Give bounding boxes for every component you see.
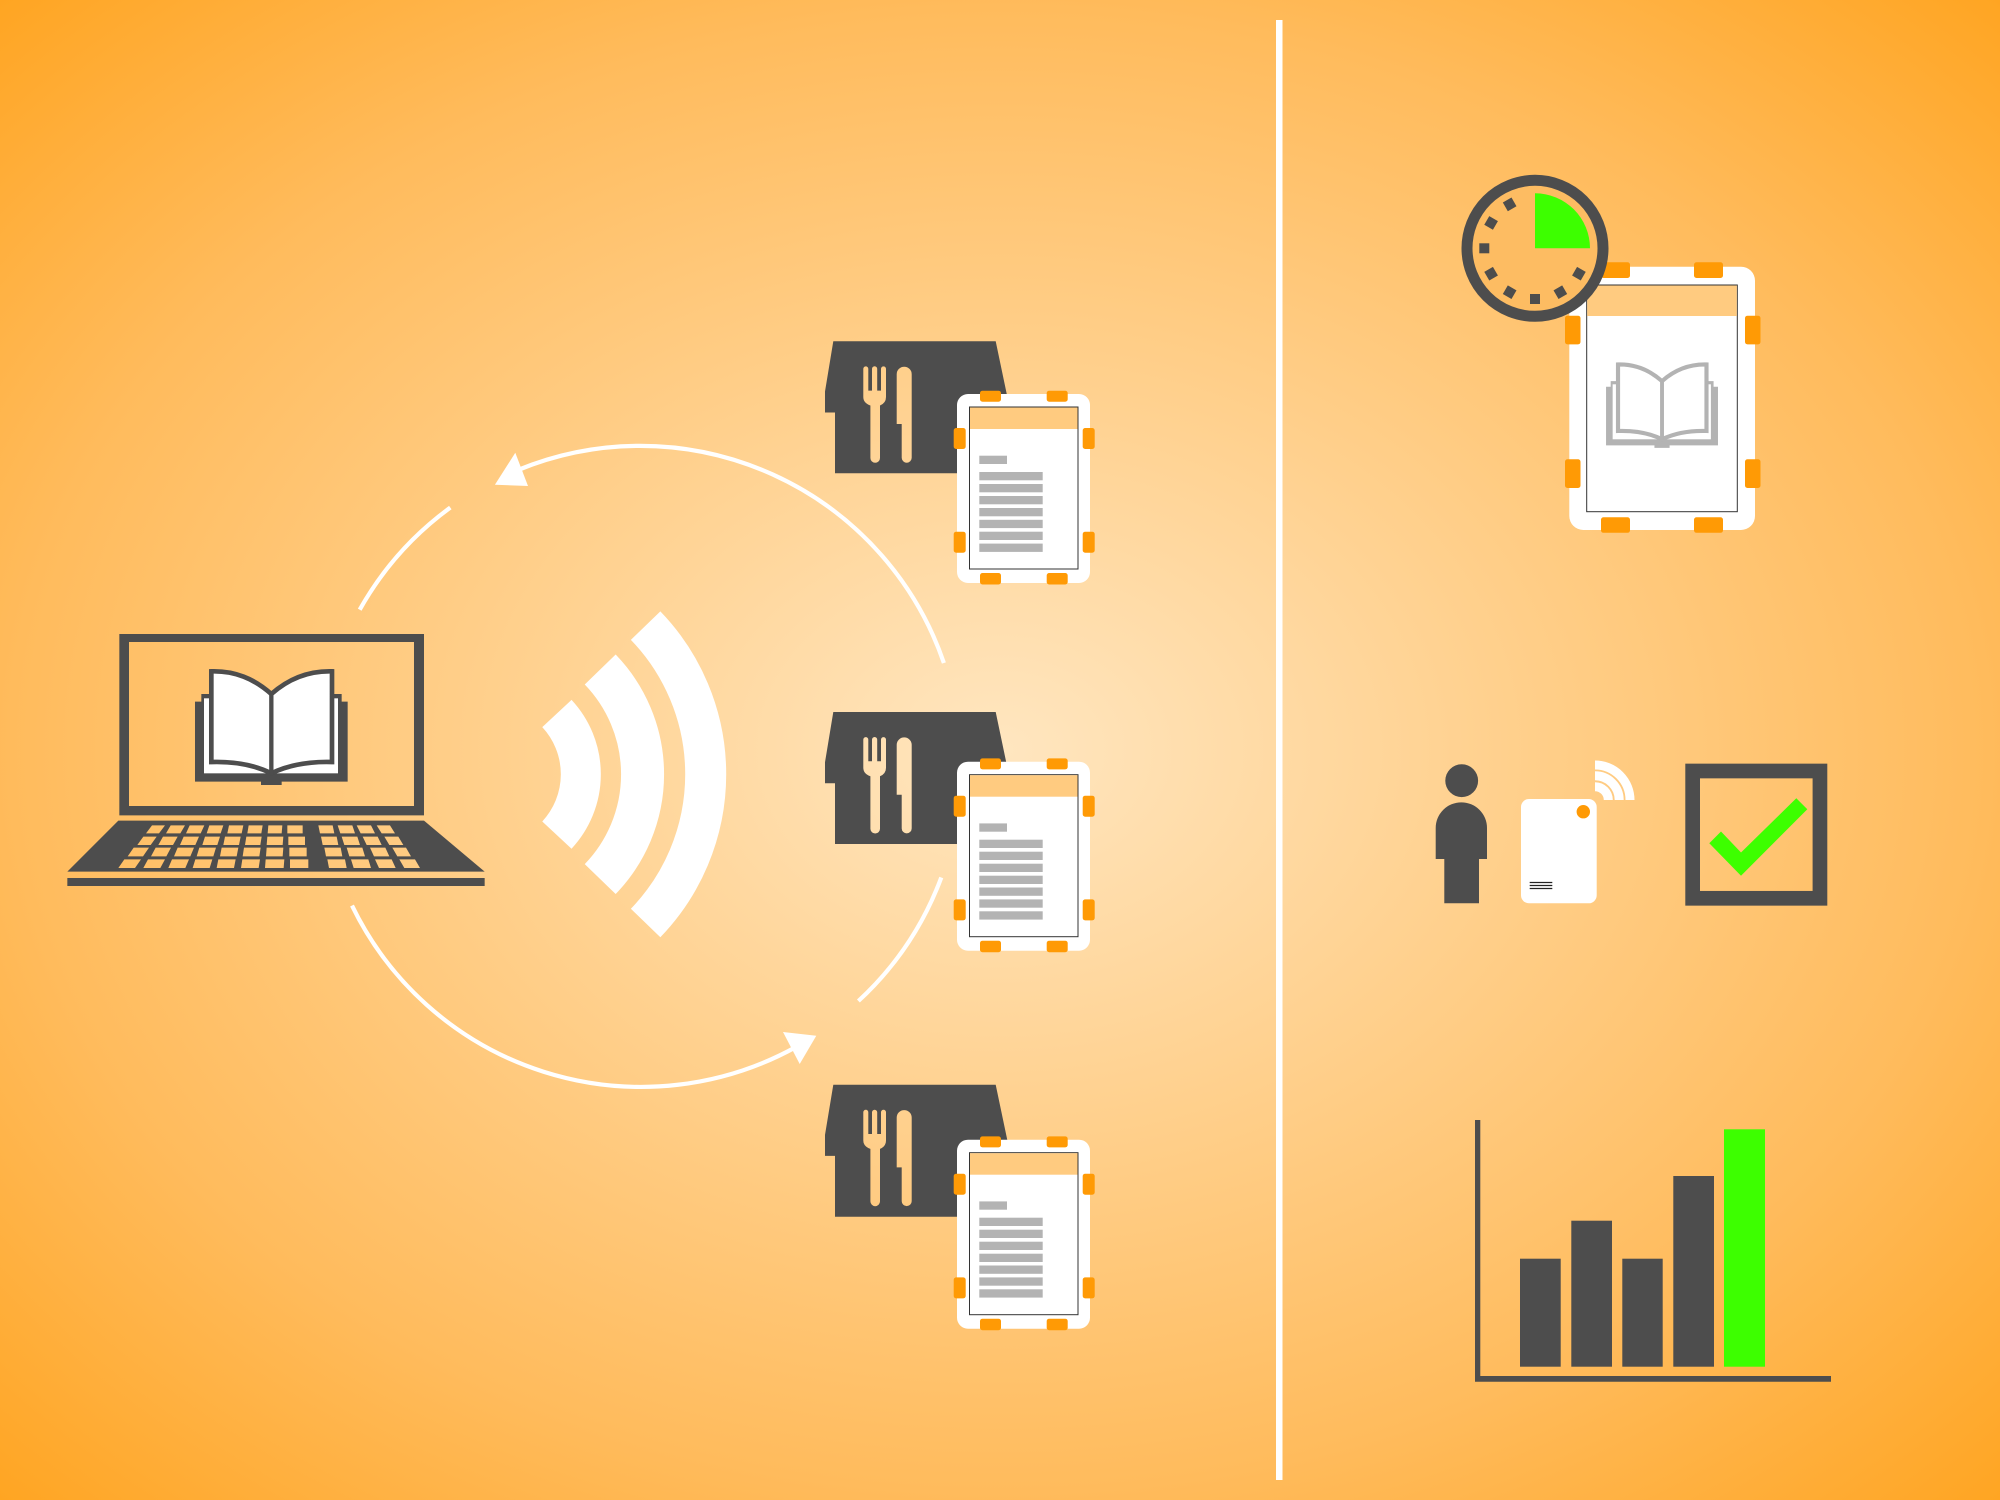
icon: grey book <box>1606 364 1718 448</box>
highlighted green bar <box>1724 1129 1765 1367</box>
bar chart <box>1475 1120 1831 1382</box>
circular arrows <box>352 446 944 1087</box>
icon: wireless card device <box>1521 765 1630 903</box>
icon: wireless waves <box>557 626 706 923</box>
restaurant icon: bottom <box>825 1085 1008 1217</box>
icon: clock with green quarter <box>1467 180 1603 316</box>
arc with arrowhead: top <box>495 446 944 663</box>
arc with arrowhead: bottom <box>352 906 816 1087</box>
tablet menu: middle <box>954 758 1095 952</box>
chart axes <box>1475 1120 1831 1382</box>
laptop screen <box>119 634 424 815</box>
icon: small wifi signal <box>1595 765 1630 800</box>
restaurant icon: top <box>825 341 1008 473</box>
laptop keyboard base <box>67 821 485 872</box>
arc: upper left <box>360 508 450 610</box>
bars <box>1520 1176 1714 1367</box>
arc: lower right <box>858 878 941 1001</box>
restaurant icon: middle <box>825 712 1008 844</box>
icon: checkbox with green tick <box>1693 771 1820 898</box>
large tablet with book <box>1565 262 1760 533</box>
icon: person <box>1436 764 1487 903</box>
tablet menu: top <box>954 391 1095 584</box>
tablet menu: bottom <box>954 1136 1095 1330</box>
laptop with book <box>67 634 485 886</box>
vertical divider <box>1276 20 1282 1480</box>
icon: open book <box>195 671 348 785</box>
laptop front edge <box>67 878 485 886</box>
